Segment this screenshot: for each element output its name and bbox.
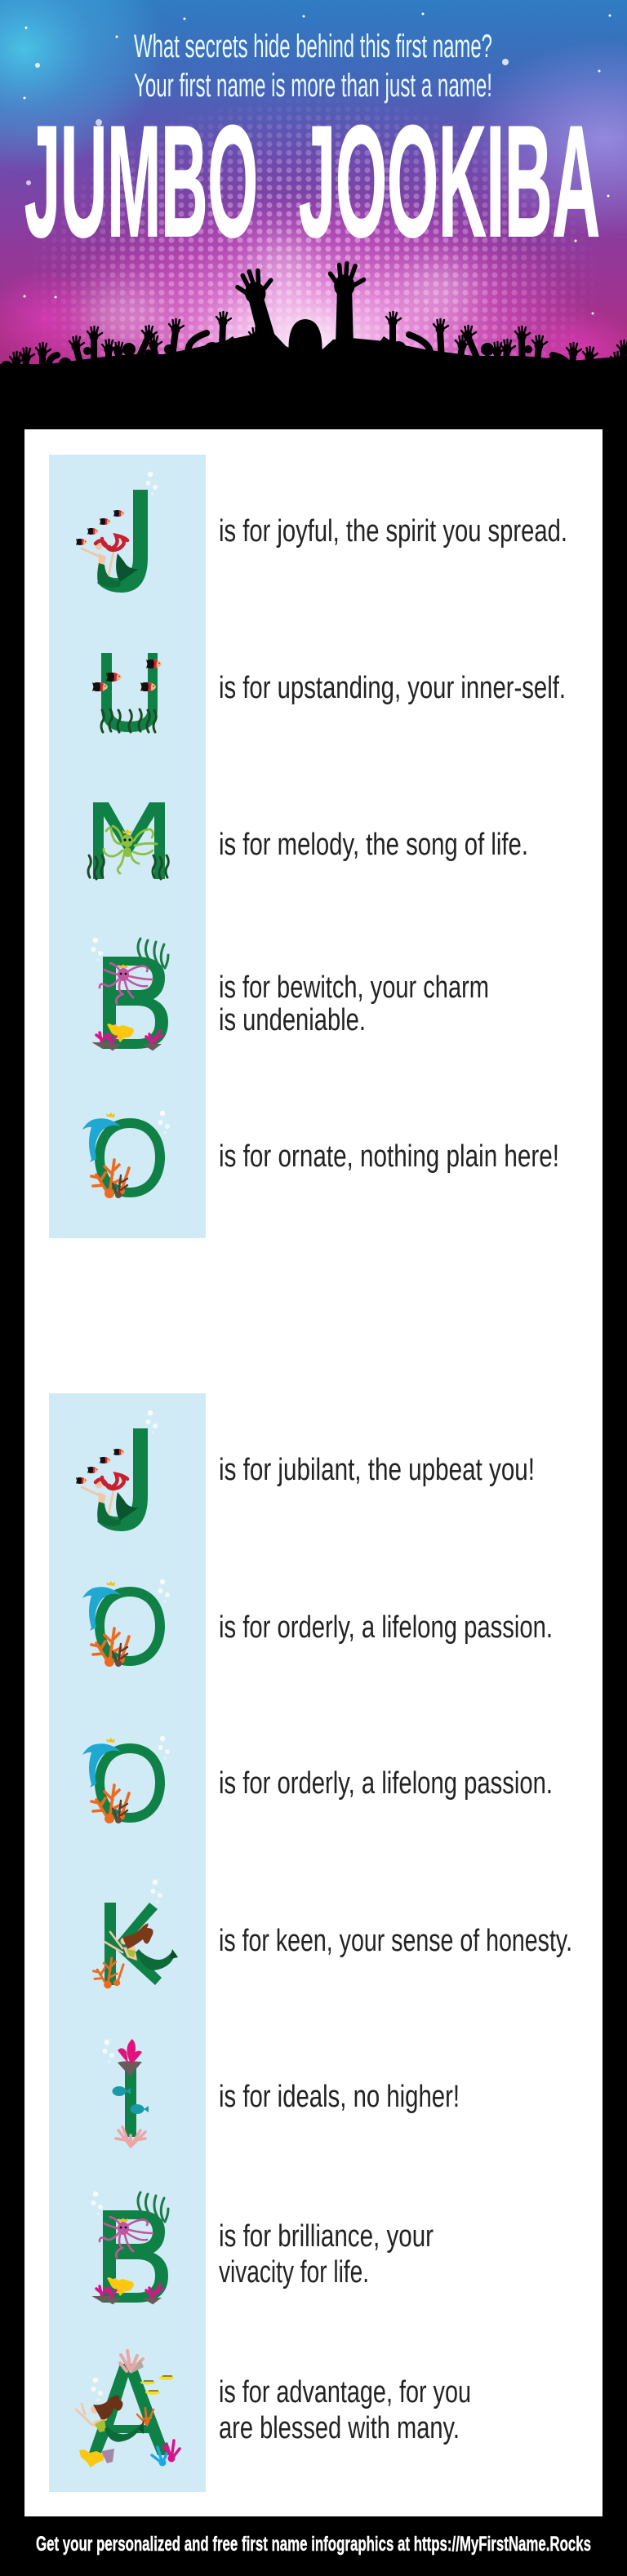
- icon: letter O with dolphin and coral: [82, 1736, 170, 1823]
- icon: letter B with octopus and coral: [91, 2192, 168, 2303]
- white content panel lower: [24, 882, 603, 2516]
- icon: letter A with mermaid, fish and coral: [76, 2351, 180, 2467]
- text: advantage: is for advantage, for you: [219, 2375, 471, 2409]
- central figure: [234, 262, 365, 359]
- heads and shoulders: [0, 336, 616, 376]
- tagline: [134, 29, 492, 104]
- icon: letter B with octopus and coral: [91, 938, 168, 1050]
- row J: [76, 472, 567, 593]
- raised arms: [14, 322, 624, 377]
- row A: [76, 2351, 471, 2467]
- hands: [10, 312, 627, 366]
- white content panel: [24, 429, 603, 884]
- blue letter column last name: [49, 1393, 206, 2492]
- panel: first name letters: [49, 455, 567, 1238]
- text: advantage: are blessed with many.: [219, 2411, 460, 2445]
- text: advantage: [219, 2375, 471, 2445]
- text: melody: is for melody, the song of life.: [219, 828, 528, 862]
- panel: last name letters: [49, 1393, 572, 2492]
- icon: letter I with fish and coral: [103, 2039, 149, 2147]
- row K: [93, 1880, 572, 1988]
- icon: letter O with dolphin and coral: [82, 1111, 170, 1198]
- text: brilliance: vivacity for life.: [219, 2255, 369, 2290]
- text: bewitch: [219, 970, 489, 1037]
- text: brilliance: [219, 2219, 434, 2290]
- text: brilliance: is for brilliance, your: [219, 2219, 434, 2254]
- icon: letter K with mermaid: [93, 1880, 178, 1988]
- text: ideals: is for ideals, no higher!: [219, 2080, 460, 2114]
- title: name: JUMBO: [24, 93, 258, 270]
- row B: [91, 938, 489, 1050]
- text: jubilant: is for jubilant, the upbeat you!: [219, 1453, 535, 1487]
- row O second: [82, 1736, 553, 1823]
- icon: letter U with fish and seaweed: [92, 653, 162, 732]
- crowd silhouette: [0, 262, 627, 430]
- row I: [103, 2039, 460, 2147]
- row M: [88, 802, 528, 879]
- row J: [76, 1410, 535, 1531]
- row O: [82, 1111, 559, 1198]
- icon: letter O with dolphin and coral: [82, 1579, 170, 1667]
- text: bewitch: is for bewitch, your charm: [219, 970, 489, 1005]
- icon: letter J with mermaid: [76, 1410, 158, 1531]
- row O: [82, 1579, 553, 1667]
- stage backdrop: [0, 0, 627, 364]
- row U: [92, 653, 566, 732]
- row B: [91, 2192, 434, 2303]
- blue letter column first name: [49, 455, 206, 1238]
- header banner: [0, 0, 627, 364]
- text: bewitch: is undeniable.: [219, 1003, 366, 1037]
- icon: letter J with mermaid: [76, 472, 158, 593]
- icon: letter M with green octopus: [88, 802, 168, 879]
